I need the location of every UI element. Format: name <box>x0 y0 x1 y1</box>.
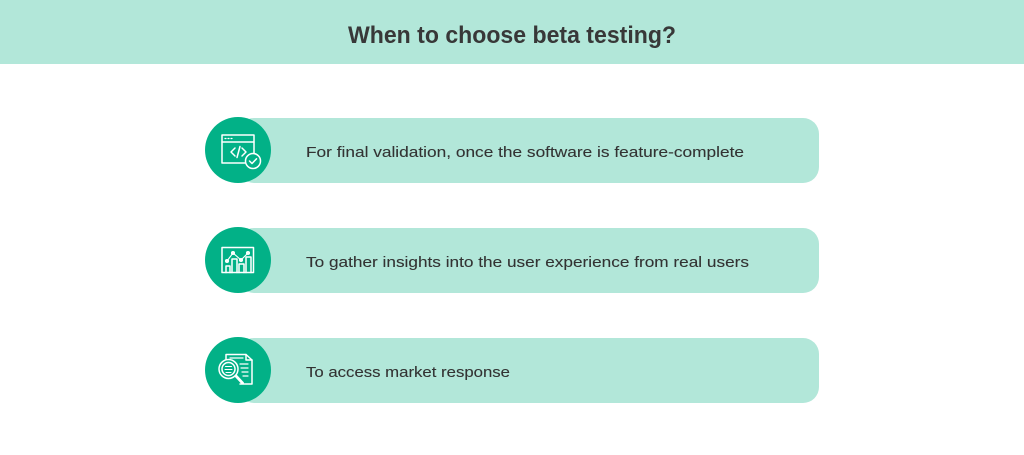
icon: document with magnifier <box>205 337 271 403</box>
header band <box>0 0 1024 64</box>
title: When to choose beta testing? <box>348 22 676 49</box>
icon: browser code window with check <box>205 117 271 183</box>
panel: market response <box>205 337 819 403</box>
text: final validation: For final validation, once the software is feature-complete <box>306 144 744 161</box>
text: user experience insights: To gather insights into the user experience from real users <box>306 254 749 271</box>
text: market response: To access market response <box>306 364 510 381</box>
icon: chart on monitor <box>205 227 271 293</box>
panel: final validation <box>205 117 819 183</box>
panel: user experience insights <box>205 227 819 293</box>
